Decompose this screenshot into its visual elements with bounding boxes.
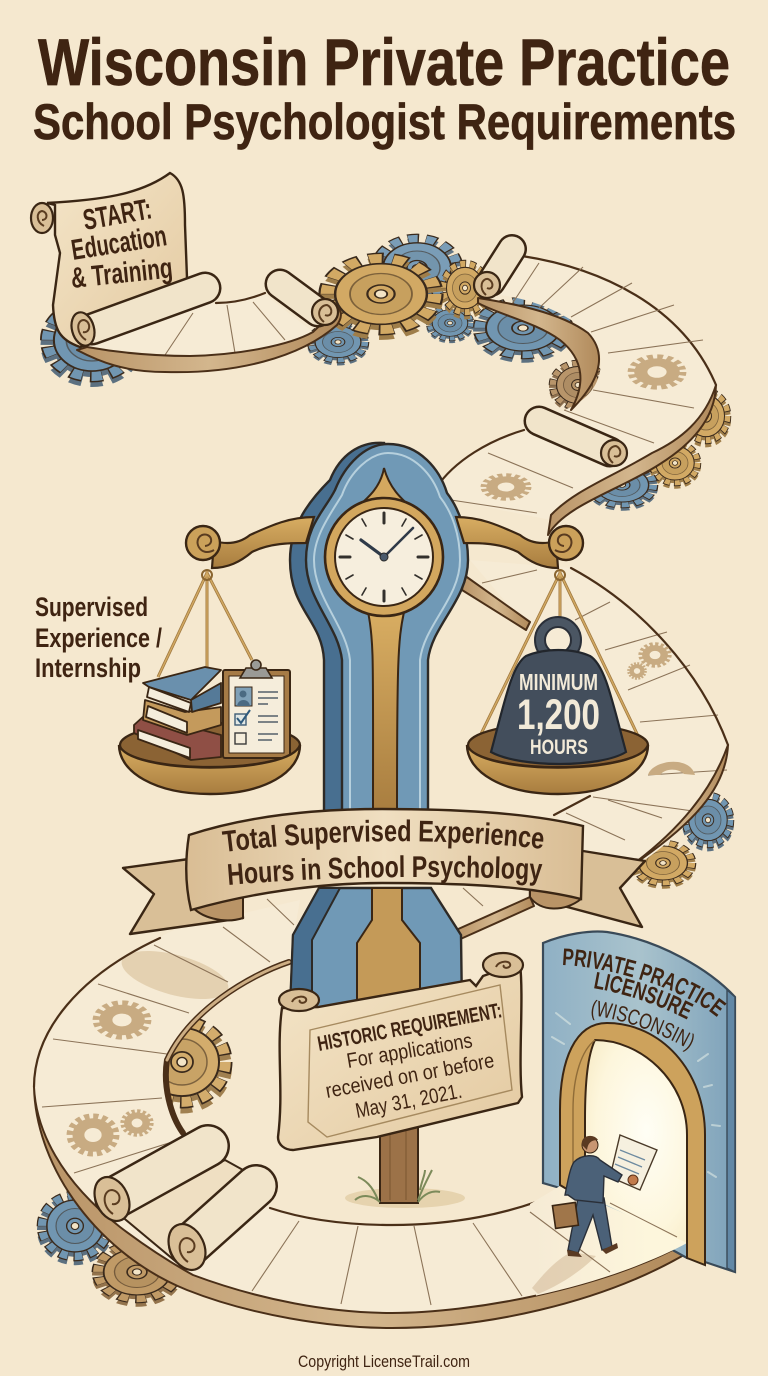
path: upper ribbon (77, 293, 341, 372)
sign text: HISTORIC REQUIREMENT: (316, 999, 504, 1056)
scroll text: START: (81, 193, 154, 237)
pan bowl (119, 745, 300, 794)
label: supervised experience: Supervised (35, 592, 148, 622)
scroll roll: short (280, 284, 338, 325)
scale right pan with weight (467, 570, 648, 794)
tower finial (352, 468, 416, 512)
clock hands (361, 528, 413, 561)
weight body (491, 650, 626, 764)
sign text: received on or before (324, 1049, 496, 1103)
historic requirement sign (278, 953, 523, 1150)
tower front (306, 444, 468, 815)
signpost (345, 1120, 465, 1208)
pan bowl (467, 745, 648, 794)
weight text: MINIMUM (519, 669, 598, 695)
label: supervised experience: Experience / (35, 623, 162, 653)
door text: LICENSURE (594, 972, 694, 1020)
sign text (316, 999, 504, 1123)
clipboard (223, 660, 290, 758)
tower stem (368, 612, 404, 815)
scroll roll: middle right (539, 421, 627, 466)
gears behind the path (42, 239, 730, 1302)
clock (325, 498, 443, 616)
person with briefcase and certificate (552, 1135, 657, 1257)
weight text: HOURS (530, 736, 588, 759)
door text: PRIVATE PRACTICE (563, 948, 726, 1017)
torso (565, 1156, 622, 1203)
scroll text: & Training (69, 252, 174, 295)
weight text: 1,200 (517, 691, 600, 739)
door arch frame (560, 1023, 705, 1265)
door opening glow (585, 1040, 687, 1243)
floor lines and shadow (530, 1203, 677, 1294)
path: lower ring ribbon (34, 888, 689, 1328)
scroll roll: upper right (474, 249, 512, 298)
copyright: Copyright LicenseTrail.com (298, 1352, 470, 1371)
path: right S-curve ribbon (436, 256, 716, 535)
banner text: Hours in School Psychology (228, 855, 542, 886)
banner text: Total Supervised Experience (222, 819, 544, 852)
scroll text: Education (69, 220, 169, 267)
door text (563, 948, 726, 1052)
banner text (222, 819, 544, 886)
legs (568, 1198, 612, 1253)
door panel (543, 931, 735, 1272)
pan interior (120, 723, 300, 767)
floor through the door (530, 1186, 687, 1296)
label: supervised experience (35, 592, 162, 683)
gear: large gold, inside lower ring (162, 959, 291, 1136)
sign text: May 31, 2021. (354, 1080, 464, 1123)
flat gears printed on the path (70, 357, 695, 1153)
clock tower (290, 443, 468, 815)
scroll rolls: lower left (88, 1146, 270, 1276)
weight ring (540, 622, 576, 658)
scroll text (69, 193, 174, 295)
sign text: For applications (345, 1029, 474, 1073)
title (33, 25, 736, 150)
banner (122, 808, 646, 936)
door text: (WISCONSIN) (592, 1000, 694, 1052)
certificate (610, 1135, 657, 1190)
head (582, 1137, 598, 1153)
start scroll (31, 173, 190, 347)
scale beam (186, 517, 583, 568)
tower lower section (290, 888, 462, 1010)
tower back shade (290, 443, 384, 815)
books (134, 667, 221, 760)
scroll roll: start (68, 288, 205, 348)
label: supervised experience: Internship (35, 653, 141, 683)
banner tails (123, 859, 243, 934)
doorway: private practice licensure (530, 930, 736, 1296)
grass (355, 1170, 440, 1202)
briefcase (552, 1202, 578, 1228)
banner body (186, 809, 583, 910)
path: middle right ribbon (456, 560, 728, 941)
scale left pan with books and clipboard (119, 570, 300, 794)
chains (158, 570, 252, 677)
weight text (517, 669, 600, 759)
